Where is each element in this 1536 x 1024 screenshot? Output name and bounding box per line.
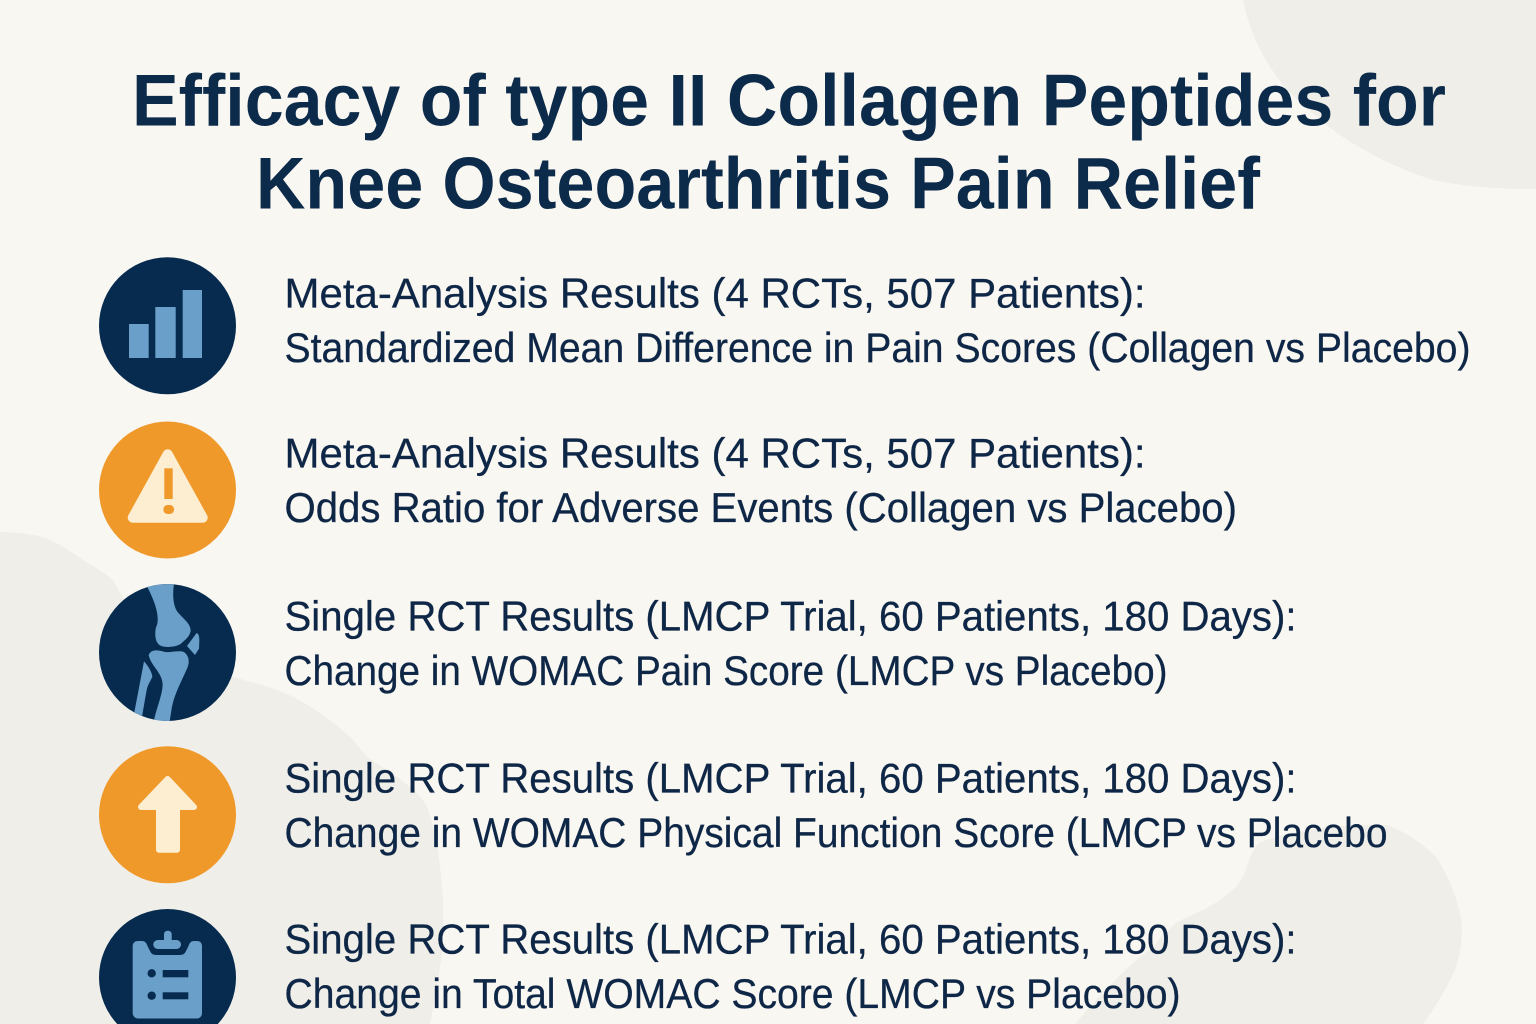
row 4: WOMAC physical function bbox=[99, 746, 1388, 883]
text: meta-analysis adverse events: Meta-Analysis Results (4 RCTs, 507 Patients): bbox=[284, 430, 1146, 476]
title bbox=[132, 60, 1446, 224]
text: LMCP total score: Change in Total WOMAC Score (LMCP vs Placebo) bbox=[284, 970, 1180, 1017]
text: meta-analysis adverse events bbox=[284, 430, 1237, 531]
icon: up arrow bbox=[99, 746, 236, 883]
text: LMCP pain score: Single RCT Results (LMCP Trial, 60 Patients, 180 Days): bbox=[284, 592, 1296, 640]
text: LMCP physical function: Single RCT Results (LMCP Trial, 60 Patients, 180 Days): bbox=[284, 754, 1296, 802]
text: meta-analysis pain scores bbox=[284, 270, 1470, 371]
text: meta-analysis pain scores: Meta-Analysis Results (4 RCTs, 507 Patients): bbox=[284, 270, 1146, 316]
icon: knee joint bbox=[99, 583, 236, 723]
text: meta-analysis pain scores: Standardized Mean Difference in Pain Scores (Collagen vs Placebo) bbox=[284, 324, 1470, 371]
text: LMCP total score: Single RCT Results (LMCP Trial, 60 Patients, 180 Days): bbox=[284, 916, 1296, 962]
text: LMCP pain score bbox=[284, 592, 1296, 694]
icon: warning triangle bbox=[99, 422, 236, 558]
row 3: WOMAC pain bbox=[99, 583, 1296, 723]
row 2: adverse events bbox=[99, 422, 1237, 558]
text: LMCP physical function bbox=[284, 754, 1388, 856]
row 1: standardized mean difference bbox=[99, 257, 1470, 394]
text: meta-analysis adverse events: Odds Ratio for Adverse Events (Collagen vs Placebo) bbox=[284, 484, 1237, 531]
text: LMCP physical function: Change in WOMAC Physical Function Score (LMCP vs Placebo bbox=[284, 809, 1388, 856]
text: LMCP pain score: Change in WOMAC Pain Score (LMCP vs Placebo) bbox=[284, 647, 1168, 694]
title: Knee Osteoarthritis Pain Relief bbox=[256, 144, 1261, 224]
title: Efficacy of type II Collagen Peptides for bbox=[132, 60, 1446, 142]
text: LMCP total score bbox=[284, 916, 1296, 1017]
icon: bar chart bbox=[99, 257, 236, 394]
row 5: total WOMAC bbox=[99, 909, 1296, 1024]
icon: clipboard bbox=[99, 909, 236, 1024]
